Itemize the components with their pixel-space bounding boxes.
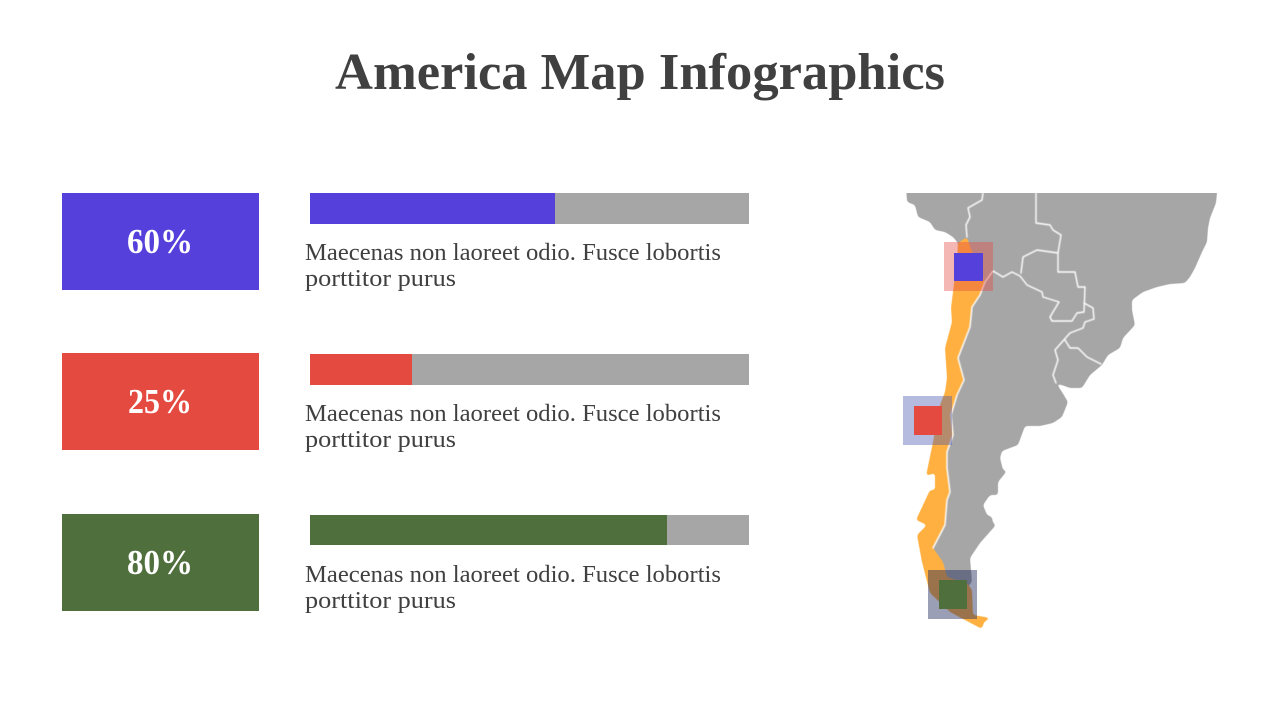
description 2: [305, 401, 721, 453]
percent box 25%: 25%: [128, 382, 192, 421]
progress bar 25%: [310, 354, 749, 385]
marker: centre (red on blue): [903, 396, 952, 445]
description 2: porttitor purus: [305, 427, 456, 453]
row 1: 60%: [62, 193, 749, 292]
description 3: Maecenas non laoreet odio. Fusce lobortis: [305, 562, 721, 588]
percent box 60%: 60%: [127, 222, 193, 261]
percent box 80%: 80%: [127, 543, 193, 582]
percent box 60%: [62, 193, 259, 290]
description 1: Maecenas non laoreet odio. Fusce lobortis: [305, 240, 721, 266]
description 3: [305, 562, 721, 614]
description 1: porttitor purus: [305, 266, 456, 292]
progress bar 80%: [310, 515, 749, 545]
percent box 25%: [62, 353, 259, 450]
row 3: 80%: [62, 514, 749, 614]
map of southern South America: [903, 185, 1217, 629]
map: orange highlighted country: [916, 237, 991, 629]
row 2: 25%: [62, 353, 749, 453]
description 1: [305, 240, 721, 292]
description 2: Maecenas non laoreet odio. Fusce lobortis: [305, 401, 721, 427]
map: grey land mass: [906, 185, 1217, 590]
map: country borders: [933, 193, 1101, 548]
marker: north (blue on red): [944, 242, 993, 291]
percent box 80%: [62, 514, 259, 611]
title: America Map Infographics: [335, 44, 945, 101]
description 3: porttitor purus: [305, 588, 456, 614]
progress bar 60%: [310, 193, 749, 224]
marker: south (green on navy): [928, 570, 977, 619]
